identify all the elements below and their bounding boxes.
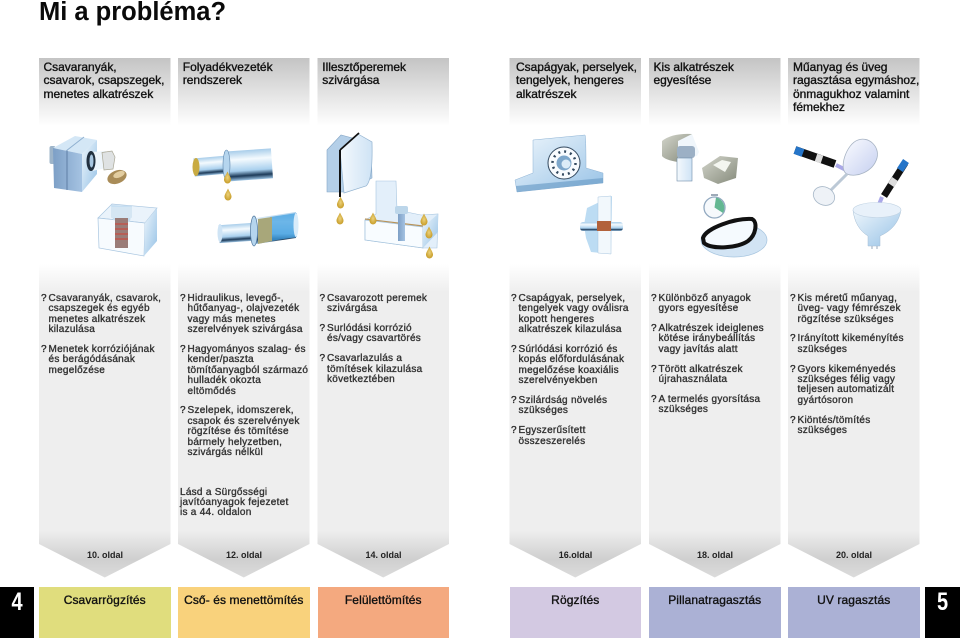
tab: Felülettömítés: Felülettömítés bbox=[345, 593, 422, 607]
heading: column 4: Csapágyak, perselyek, bbox=[516, 60, 637, 74]
text block: column 1: Csavaranyák, csavarok, bbox=[48, 293, 161, 304]
text block: column 3: Surlódási korrózió bbox=[327, 323, 412, 334]
page number 5: 5 bbox=[937, 588, 948, 616]
callout: see emergency repair chapter: javítóanyagok fejezetet bbox=[180, 497, 288, 508]
text block: column 5: gyors egyesítése bbox=[658, 303, 738, 314]
heading: column 3: szivárgása bbox=[322, 73, 379, 87]
text block: column 2: szerelvények szivárgása bbox=[188, 324, 303, 335]
text block: column 2: ? bbox=[180, 293, 186, 304]
tab: Csavarrögzítés: Csavarrögzítés bbox=[64, 593, 146, 607]
tab: Pillanatragasztás bbox=[649, 586, 780, 638]
text block: column 6: ? bbox=[790, 333, 796, 344]
heading: column 1: csavarok, csapszegek, bbox=[44, 73, 164, 87]
heading: column 6: Műanyag és üveg bbox=[793, 60, 887, 74]
text block: column 5: vagy javítás alatt bbox=[658, 344, 738, 355]
text block: column 4: Egyszerűsített bbox=[518, 425, 586, 436]
text block: column 6: üveg- vagy fémrészek bbox=[798, 303, 901, 314]
text block: column 1: és berágódásának bbox=[48, 354, 135, 365]
text block: column 4: ? bbox=[511, 344, 517, 355]
text block: column 2: szivárgás nélkül bbox=[188, 447, 263, 458]
text block: column 6: ? bbox=[790, 415, 796, 426]
text block: column 1: ? bbox=[41, 344, 47, 355]
text block: column 3: szivárgása bbox=[327, 303, 378, 314]
text block: column 6: szükséges bbox=[798, 344, 847, 355]
text block: column 2: Hidraulikus, levegő-, bbox=[188, 293, 284, 304]
tab: Felülettömítés bbox=[318, 586, 449, 638]
text block: column 4: ? bbox=[511, 293, 517, 304]
icon: gasket ring bbox=[701, 219, 767, 257]
text block: column 5: A termelés gyorsítása bbox=[658, 394, 760, 405]
text block: column 4: Súrlódási korrózió és bbox=[518, 344, 618, 355]
text block: column 1: megelőzése bbox=[48, 365, 105, 376]
text block: column 4: kopott hengeres bbox=[518, 314, 594, 325]
text block: column 5: újrahasználata bbox=[658, 374, 727, 385]
icon: split block with nut bbox=[50, 136, 129, 192]
text block: column 6: Kis méretű műanyag, bbox=[798, 293, 897, 304]
text block: column 5: szükséges bbox=[658, 404, 708, 415]
text block: column 6 bbox=[790, 293, 904, 436]
heading: column 4 bbox=[516, 60, 637, 101]
text block: column 2: eltömődés bbox=[188, 386, 236, 397]
text block: column 2: csapok és szerelvények bbox=[188, 416, 300, 427]
text block: column 5 bbox=[651, 293, 764, 415]
text block: column 4: alkatrészek kilazulása bbox=[518, 324, 622, 335]
text block: column 3: és/vagy csavartörés bbox=[327, 333, 421, 344]
icon: wine glass with UV lamp bbox=[795, 139, 877, 209]
text block: column 6: rögzítése szükséges bbox=[798, 314, 894, 325]
text block: column 6: Irányított kikeményítés bbox=[798, 333, 904, 344]
callout: see emergency repair chapter: is a 44. oldalon bbox=[180, 507, 252, 518]
callout: see emergency repair chapter: Lásd a Sürgősségi bbox=[180, 486, 267, 498]
text block: column 2: bármely helyzetben, bbox=[188, 437, 282, 448]
page ref: column 1: 10. oldal bbox=[87, 550, 123, 560]
text block: column 4: Szilárdság növelés bbox=[518, 395, 607, 406]
text block: column 6: szükséges bbox=[798, 425, 847, 436]
tab: UV ragasztás bbox=[788, 586, 920, 638]
text block: column 6: Kiöntés/tömítés bbox=[798, 415, 870, 426]
page number 4 bbox=[0, 586, 34, 638]
text block: column 1 bbox=[41, 293, 161, 376]
page ref: column 6: 20. oldal bbox=[836, 550, 872, 560]
icon: flange cross-section with bolt bbox=[365, 181, 438, 258]
text block: column 5: ? bbox=[651, 394, 657, 405]
icon: pillow block bearing bbox=[515, 135, 603, 192]
text block: column 6: gyártósoron bbox=[798, 395, 853, 406]
text block: column 3 bbox=[320, 293, 428, 385]
text block: column 5: ? bbox=[651, 364, 657, 375]
tab: Cső- és menettömítés bbox=[178, 586, 310, 638]
text block: column 3: ? bbox=[320, 353, 325, 364]
text block: column 6: szükséges félig vagy bbox=[798, 374, 895, 385]
text block: column 4: kopás előfordulásának bbox=[518, 354, 624, 365]
heading: column 4: tengelyek, hengeres bbox=[516, 73, 624, 87]
text block: column 3: Csavarozott peremek bbox=[327, 293, 427, 304]
text block: column 2: kender/paszta bbox=[188, 354, 254, 365]
text block: column 5: Törött alkatrészek bbox=[658, 364, 743, 375]
icon: sealed pipe fitting bbox=[218, 212, 298, 246]
icon: pipe fitting with leak bbox=[192, 148, 273, 200]
tab: Csavarrögzítés bbox=[39, 586, 170, 638]
text block: column 1: ? bbox=[41, 293, 47, 304]
text block: column 4: ? bbox=[511, 425, 517, 436]
tab: Pillanatragasztás: Pillanatragasztás bbox=[668, 593, 761, 607]
text block: column 1: kilazulása bbox=[48, 324, 95, 335]
page number 5 bbox=[925, 586, 960, 638]
text block: column 6: teljesen automatizált bbox=[798, 384, 894, 395]
icon: bolt in cutaway block bbox=[98, 204, 157, 256]
heading: column 3: Illesztőperemek bbox=[322, 60, 406, 74]
text block: column 3: ? bbox=[320, 293, 325, 304]
text block: column 1: csapszegek és egyéb bbox=[48, 303, 150, 314]
text block: column 2: tömítőanyagból származó bbox=[188, 365, 308, 376]
heading: column 2 bbox=[183, 60, 273, 87]
heading: column 2: Folyadékvezeték bbox=[183, 60, 273, 74]
heading: column 1 bbox=[44, 60, 164, 101]
text block: column 1: menetes alkatrészek bbox=[48, 314, 145, 325]
text block: column 5: Különböző anyagok bbox=[658, 293, 751, 304]
text block: column 2: Szelepek, idomszerek, bbox=[188, 405, 294, 416]
icon: flange cover with leak bbox=[327, 133, 372, 224]
page ref: column 2: 12. oldal bbox=[226, 550, 262, 560]
text block: column 6: ? bbox=[790, 364, 796, 375]
text block: column 2: ? bbox=[180, 344, 186, 355]
text block: column 2 bbox=[180, 293, 308, 458]
heading: column 6: ragasztása egymáshoz, bbox=[793, 73, 919, 87]
text block: column 4 bbox=[511, 293, 629, 447]
heading: column 5: Kis alkatrészek bbox=[654, 60, 734, 74]
icon: reflector lamp with UV lamp bbox=[853, 161, 906, 249]
heading: column 1: menetes alkatrészek bbox=[44, 87, 153, 101]
text block: column 6: ? bbox=[790, 293, 796, 304]
text block: column 4: Csapágyak, perselyek, bbox=[518, 293, 625, 304]
page number 4: 4 bbox=[11, 588, 23, 616]
text block: column 2: vagy más menetes bbox=[188, 314, 276, 325]
heading: column 6 bbox=[793, 60, 919, 114]
tab: Cső- és menettömítés: Cső- és menettömítés bbox=[184, 593, 303, 607]
text block: column 6: Gyors kikeményedés bbox=[798, 364, 896, 375]
heading: column 2: rendszerek bbox=[183, 73, 242, 87]
text block: column 4: szerelvényekben bbox=[518, 375, 598, 386]
page ref: column 3: 14. oldal bbox=[365, 550, 402, 560]
text block: column 2: Hagyományos szalag- és bbox=[188, 344, 306, 355]
text block: column 1: Menetek korróziójának bbox=[48, 344, 155, 355]
text block: column 4: szükséges bbox=[518, 405, 568, 416]
icon: shaft with friction corrosion bbox=[580, 196, 623, 254]
heading: column 4: alkatrészek bbox=[516, 87, 576, 101]
tab: UV ragasztás: UV ragasztás bbox=[817, 593, 890, 607]
icon: small glued parts bbox=[662, 134, 738, 184]
text block: column 4: megelőzése koaxiális bbox=[518, 365, 619, 376]
icon: stopwatch bbox=[704, 195, 725, 218]
text block: column 4: összeszerelés bbox=[518, 436, 585, 447]
callout: see emergency repair chapter bbox=[180, 486, 288, 518]
heading: column 5: egyesítése bbox=[654, 73, 711, 87]
heading: column 6: önmagukhoz valamint bbox=[793, 87, 909, 101]
text block: column 2: ? bbox=[180, 405, 186, 416]
heading: column 3 bbox=[322, 60, 406, 87]
text block: column 4: ? bbox=[511, 395, 517, 406]
page ref: column 4: 16.oldal bbox=[559, 550, 592, 560]
tab: Rögzítés: Rögzítés bbox=[551, 593, 599, 607]
text block: column 5: Alkatrészek ideiglenes bbox=[658, 323, 764, 334]
text block: column 3: Csavarlazulás a bbox=[327, 353, 402, 364]
text block: column 5: kötése iránybeállítás bbox=[658, 333, 755, 344]
text block: column 2: rögzítése és tömítése bbox=[188, 426, 289, 437]
text block: column 3: következtében bbox=[327, 374, 395, 385]
text block: column 5: ? bbox=[651, 293, 657, 304]
page ref: column 5: 18. oldal bbox=[697, 550, 733, 560]
text block: column 2: hűtőanyag-, olajvezeték bbox=[188, 303, 299, 314]
text block: column 5: ? bbox=[651, 323, 657, 334]
text block: column 2: hulladék okozta bbox=[188, 375, 261, 386]
text block: column 4: tengelyek vagy oválisra bbox=[518, 303, 629, 314]
heading: column 1: Csavaranyák, bbox=[44, 60, 117, 74]
heading: column 5 bbox=[654, 60, 734, 87]
heading: column 6: fémekhez bbox=[793, 100, 845, 114]
text block: column 3: tömítések kilazulása bbox=[327, 364, 422, 375]
tab: Rögzítés bbox=[510, 586, 641, 638]
text block: column 3: ? bbox=[320, 323, 325, 334]
